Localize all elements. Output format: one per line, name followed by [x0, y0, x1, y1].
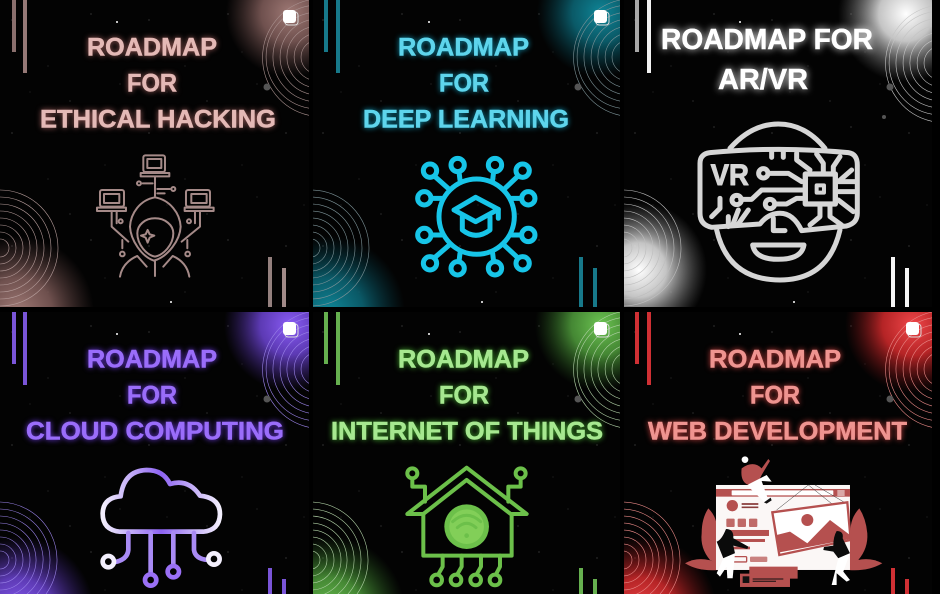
heading: roadmap for web development: WEB DEVELOPMENT [648, 418, 907, 446]
panel background: deep learning [311, 0, 620, 307]
person left [717, 529, 748, 578]
browser window [716, 485, 850, 570]
icon: hooded hacker with laptops [97, 155, 214, 277]
heading: roadmap for cloud computing: CLOUD COMPUTING [26, 418, 284, 446]
panel: cloud computing [0, 312, 309, 594]
icon: face wearing VR headset with circuits: VR [711, 159, 749, 192]
panel: AR/VR [623, 0, 932, 307]
icon: smart home with wifi and circuits [407, 468, 527, 585]
panel background: AR/VR [623, 0, 932, 307]
heading: roadmap for AR/VR: ROADMAP FOR [661, 24, 873, 56]
panel background: internet of things [311, 312, 620, 594]
panel background: ethical hacking [0, 0, 309, 307]
heading: roadmap for internet of things: ROADMAP [398, 346, 529, 374]
tilted image card [772, 485, 851, 555]
heading: roadmap for cloud computing [26, 346, 284, 446]
panel: ethical hacking [0, 0, 309, 307]
plants [685, 508, 882, 570]
heading: roadmap for cloud computing: ROADMAP [87, 346, 217, 374]
heading: roadmap for AR/VR: AR/VR [718, 64, 808, 96]
heading: roadmap for ethical hacking: ETHICAL HACKING [40, 106, 276, 134]
heading: roadmap for web development: FOR [750, 382, 800, 410]
heading: roadmap for ethical hacking: FOR [127, 70, 177, 98]
heading: roadmap for deep learning [363, 34, 569, 134]
panel: web development [623, 312, 932, 594]
panel: internet of things [311, 312, 620, 594]
icon: face wearing VR headset with circuits [700, 124, 857, 280]
panel: deep learning [311, 0, 620, 307]
heading: roadmap for deep learning: DEEP LEARNING [363, 106, 569, 134]
icon: cloud with network connectors [103, 470, 220, 586]
illustration: people building a website [685, 456, 882, 587]
person sitting on top [741, 456, 772, 504]
panel background: cloud computing [0, 312, 309, 594]
heading: roadmap for web development [648, 346, 907, 446]
heading: roadmap for internet of things [331, 346, 603, 446]
heading: roadmap for internet of things: FOR [439, 382, 489, 410]
heading: roadmap for AR/VR [661, 24, 873, 96]
heading: roadmap for ethical hacking [40, 34, 276, 134]
heading: roadmap for deep learning: ROADMAP [398, 34, 529, 62]
icon: neural network with graduation cap [418, 158, 535, 275]
heading: roadmap for ethical hacking: ROADMAP [87, 34, 217, 62]
heading: roadmap for web development: ROADMAP [709, 346, 841, 374]
panel background: web development [623, 312, 932, 594]
message cards [740, 567, 798, 587]
heading: roadmap for internet of things: INTERNET OF THINGS [331, 418, 603, 446]
heading: roadmap for deep learning: FOR [439, 70, 489, 98]
heading: roadmap for cloud computing: FOR [127, 382, 177, 410]
person right [823, 531, 850, 585]
